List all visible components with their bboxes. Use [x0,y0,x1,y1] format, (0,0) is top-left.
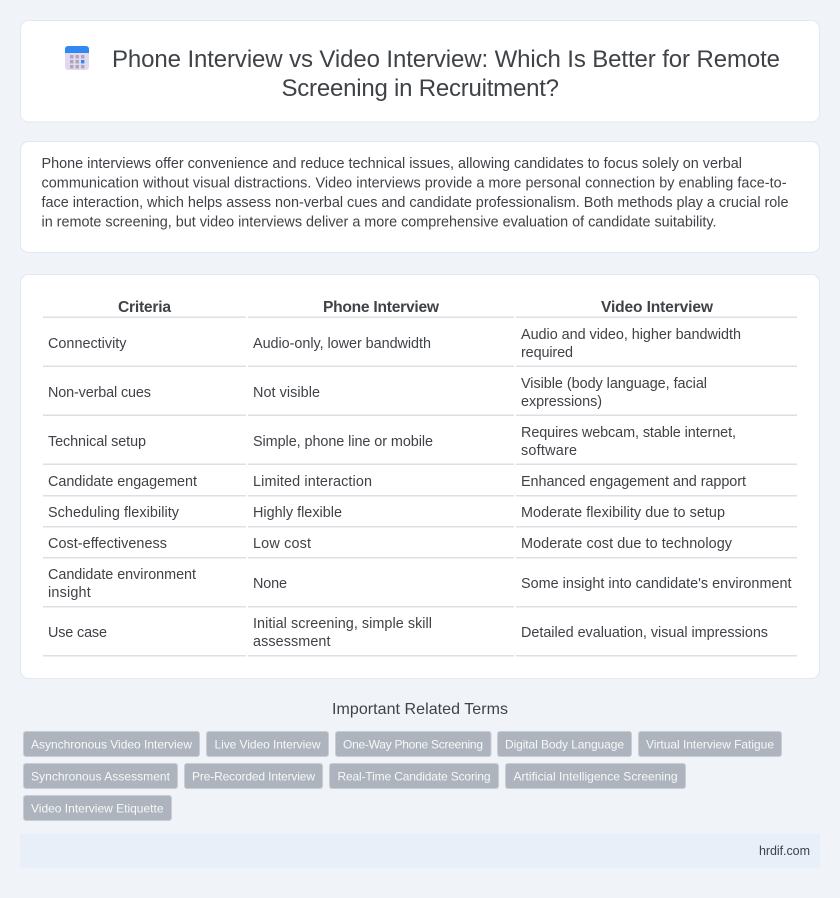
row: technical setup [48,425,736,459]
row: connectivity [48,327,741,361]
row: technical setup: software [521,443,577,459]
row: cost-effectiveness: Moderate cost due to technology [521,536,733,552]
row: candidate environment insight: insight [48,585,91,601]
row: non-verbal cues [48,376,707,410]
text block: summary paragraph [42,156,788,230]
text block: summary paragraph: Phone interviews offer convenience and reduce technical issues, allowing candidates to focus solely on verbal [42,156,742,172]
tag: Digital Body Language [505,737,624,751]
table header: Phone Interview [323,299,440,316]
tag [24,764,178,788]
row: non-verbal cues: Non-verbal cues [48,385,151,401]
row: candidate engagement: Limited interaction [253,474,372,490]
row: use case: Initial screening, simple skill [253,616,432,632]
row: use case [48,616,768,650]
tag: Real-Time Candidate Scoring [338,769,490,783]
footer: hrdif.com [759,844,810,858]
row: candidate environment insight: Candidate environment [48,567,196,583]
icon: calendar [65,46,89,70]
row: use case: Use case [48,625,107,641]
row: scheduling flexibility: Highly flexible [253,505,342,521]
tag: Live Video Interview [214,737,321,751]
tag: Virtual Interview Fatigue [646,737,774,751]
row: use case: Detailed evaluation, visual impressions [521,625,768,641]
panel: header [20,20,820,122]
row: scheduling flexibility [48,505,725,521]
row: non-verbal cues: Visible (body language, facial [521,376,707,392]
row: non-verbal cues: Not visible [253,385,320,401]
title: Phone Interview vs Video Interview: Which Is Better for Remote [112,46,780,73]
row: cost-effectiveness [48,536,733,552]
row: use case: assessment [253,634,330,650]
panel: comparison table [20,274,820,678]
tag [506,764,686,788]
tag: Synchronous Assessment [31,769,171,783]
tag [206,732,328,756]
row: connectivity: required [521,345,573,361]
row: candidate engagement: Candidate engagement [48,474,197,490]
tag [638,732,782,756]
tag [184,764,322,788]
row: scheduling flexibility: Scheduling flexibility [48,505,180,521]
row: cost-effectiveness: Low cost [253,536,311,552]
row: connectivity: Audio and video, higher bandwidth [521,327,741,343]
row: candidate environment insight: Some insight into candidate's environment [521,576,792,592]
row: technical setup: Simple, phone line or mobile [253,434,433,450]
row: connectivity: Connectivity [48,336,127,352]
row: scheduling flexibility: Moderate flexibility due to setup [521,505,725,521]
row: cost-effectiveness: Cost-effectiveness [48,536,167,552]
row: non-verbal cues: expressions) [521,394,602,410]
tag [330,764,498,788]
row: candidate environment insight [48,567,792,601]
tag: One-Way Phone Screening [343,737,483,751]
table header: Criteria [118,299,171,316]
title [112,46,780,102]
tag [498,732,632,756]
text block: summary paragraph: communication without visual distractions. Video interviews provide a more personal connection by enabling face-to- [42,176,787,192]
table header: Video Interview [601,299,714,316]
tag [24,796,172,820]
tag: Artificial Intelligence Screening [514,769,678,783]
text block: summary paragraph: in remote screening, but video interviews deliver a more comprehensive evaluation of candidate suitability. [42,214,716,230]
tag: Pre-Recorded Interview [192,769,315,783]
title: Screening in Recruitment? [282,75,559,102]
row: technical setup: Technical setup [48,434,146,450]
tag [336,732,491,756]
panel: introduction [20,142,820,252]
tag [24,732,200,756]
related term tags [24,732,782,820]
row: candidate environment insight: None [253,576,287,592]
text block: summary paragraph: face interaction, which helps assess non-verbal cues and candidate professionalism. Both methods play a crucial role [42,195,788,211]
heading: related terms: Important Related Terms [332,701,508,718]
footer [20,834,820,868]
row: connectivity: Audio-only, lower bandwidth [253,336,431,352]
tag: Video Interview Etiquette [31,801,164,815]
row: technical setup: Requires webcam, stable internet, [521,425,736,441]
tag: Asynchronous Video Interview [31,737,192,751]
row: candidate engagement: Enhanced engagement and rapport [521,474,746,490]
row: candidate engagement [48,474,746,490]
table header [118,299,714,316]
